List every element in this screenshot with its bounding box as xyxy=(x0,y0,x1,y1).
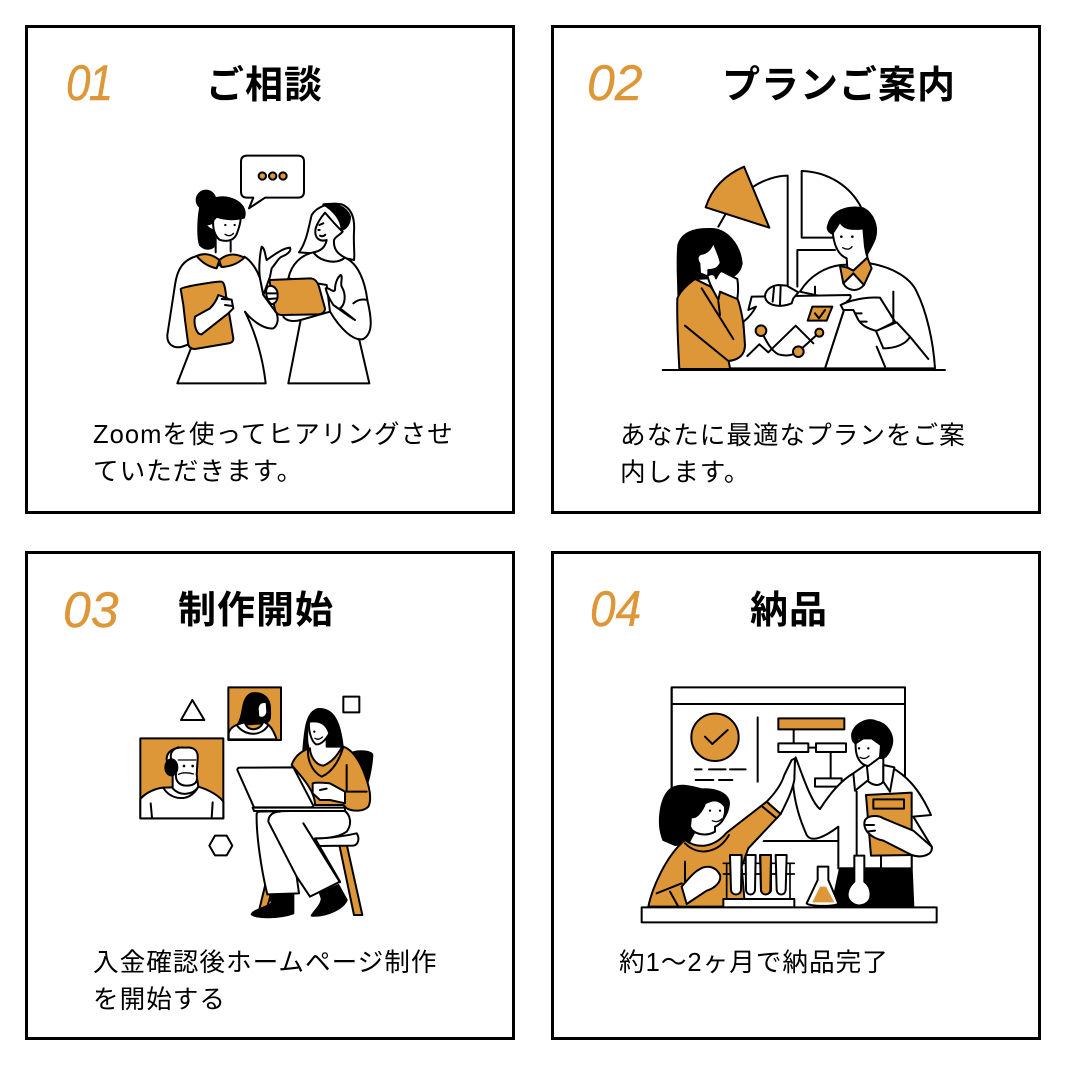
body text: step 2: 内します。 xyxy=(620,459,750,487)
step number 01: 01 xyxy=(66,55,111,111)
panel: step 2 plan guidance xyxy=(551,25,1041,514)
body text: step 1: ていただきます。 xyxy=(93,458,303,486)
heading: step 2: プランご案内 xyxy=(722,65,956,107)
step number 03: 03 xyxy=(63,582,119,638)
panel: step 3 production start xyxy=(25,551,515,1040)
body text: step 1 xyxy=(93,421,454,486)
heading: step 3: 制作開始 xyxy=(178,590,334,632)
heading: step 4: 納品 xyxy=(750,590,828,632)
body text: step 3: 入金確認後ホームページ制作 xyxy=(93,949,437,977)
panel: step 1 consultation xyxy=(25,25,515,514)
illustration: two women talking xyxy=(166,154,372,384)
body text: step 1: Zoomを使ってヒアリングさせ xyxy=(93,421,454,449)
panel: step 4 delivery xyxy=(551,551,1041,1040)
illustration: high five in the lab xyxy=(640,686,938,924)
step number 04: 04 xyxy=(590,581,641,637)
body text: step 2 xyxy=(620,422,966,487)
body text: step 2: あなたに最適なプランをご案 xyxy=(620,422,966,450)
body text: step 3 xyxy=(93,949,437,1014)
step number 02: 02 xyxy=(587,55,643,111)
body text: step 4: 約1～2ヶ月で納品完了 xyxy=(619,949,889,977)
illustration: woman on a video call xyxy=(139,686,374,918)
illustration: man and woman reviewing a plan xyxy=(662,166,946,371)
body text: step 3: を開始する xyxy=(93,986,226,1014)
heading: step 1: ご相談 xyxy=(206,65,323,107)
